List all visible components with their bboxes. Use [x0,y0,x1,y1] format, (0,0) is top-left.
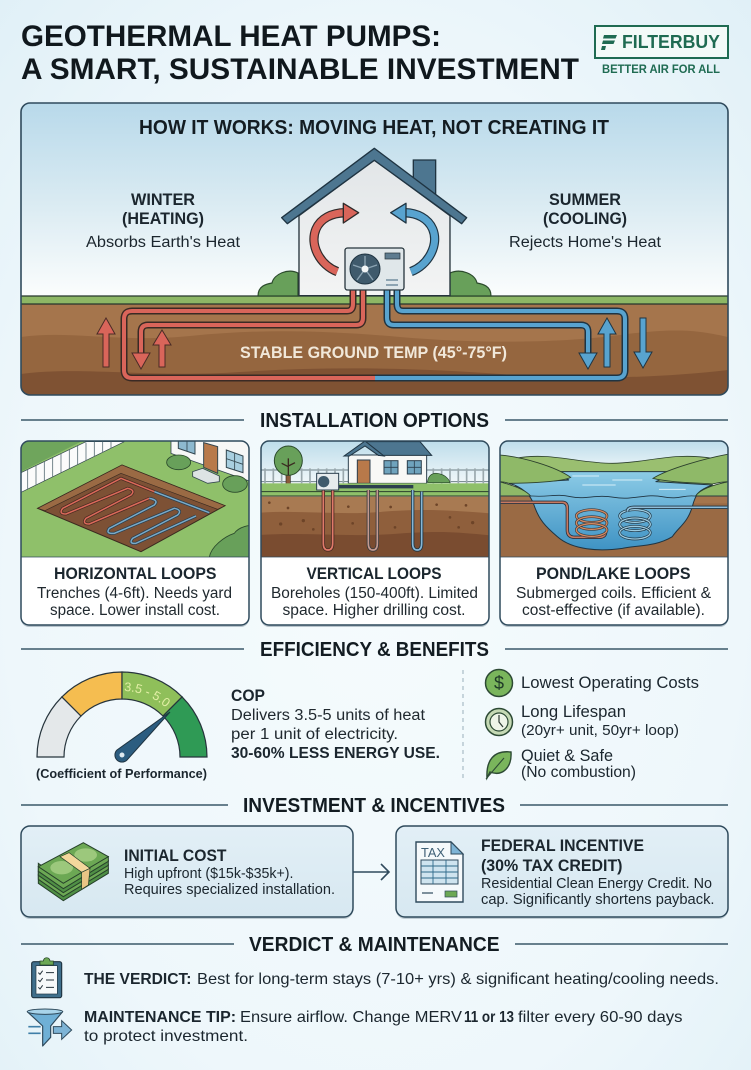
benefit: long lifespan: Long Lifespan [521,703,626,721]
panel: how it works [21,103,728,395]
benefit: lowest operating costs: $ [494,673,504,693]
text: federal incentive: cap. Significantly shortens payback. [481,892,714,908]
heading: installation options: INSTALLATION OPTIONS [260,409,489,432]
benefit: lowest operating costs [486,670,699,696]
text: maintenance tip: to protect investment. [84,1028,248,1045]
heading: verdict and maintenance: VERDICT & MAINTENANCE [249,933,500,956]
text: summer [509,191,662,251]
arrow: summer cool [391,203,435,272]
icon: tax form: TAX [421,846,446,860]
logo: Filterbuy [595,26,728,76]
arrow: cost to incentive [353,864,389,880]
text: initial cost: High upfront ($15k-$35k+). [124,865,294,882]
icon: funnel filter [27,1009,72,1046]
caption: pond/lake loops: Submerged coils. Efficient & [516,585,712,602]
text: federal incentive [481,837,714,908]
text: maintenance tip: MAINTENANCE TIP: [84,1009,236,1026]
text: federal incentive: FEDERAL INCENTIVE [481,837,644,855]
heading: how it works: HOW IT WORKS: MOVING HEAT, NOT CREATING IT [139,116,609,139]
title [21,20,579,86]
text: winter: Absorbs Earth's Heat [86,234,241,251]
panel: horizontal loops [21,440,251,627]
text: the verdict: Best for long-term stays (7-10+ yrs) & significant heating/cooling needs. [197,971,719,988]
caption: horizontal loops: space. Lower install cost. [50,602,220,619]
text: summer: (COOLING) [543,210,627,228]
text: initial cost: INITIAL COST [124,847,226,865]
benefit: long lifespan [486,703,679,739]
text: maintenance tip [84,1009,682,1045]
text: federal incentive: Residential Clean Energy Credit. No [481,876,712,892]
logo: Filterbuy: BETTER AIR FOR ALL [602,64,720,76]
text: COP: Delivers 3.5-5 units of heat [231,707,426,724]
arrows: red ground [97,318,171,369]
icon: clipboard [32,958,62,998]
caption: pond/lake loops: POND/LAKE LOOPS [536,565,690,583]
caption: vertical loops: VERTICAL LOOPS [306,565,442,583]
gauge caption: (Coefficient of Performance) [36,766,207,781]
heading: efficiency and benefits: EFFICIENCY & BENEFITS [260,638,489,661]
benefit: quiet and safe [486,747,636,781]
heading: investment and incentives: INVESTMENT & INCENTIVES [243,794,505,817]
pipes: red loop [124,290,375,378]
arrow: winter heat [314,203,359,272]
text: COP: 30-60% LESS ENERGY USE. [231,745,440,762]
label: stable ground temp: STABLE GROUND TEMP (45°-75°F) [240,344,507,362]
illustration: horizontal trench [21,440,251,557]
text: COP: COP [231,687,265,705]
caption: horizontal loops [37,565,232,619]
icon: money stack [38,843,108,901]
benefit: long lifespan: (20yr+ unit, 50yr+ loop) [521,722,679,739]
illustration: vertical boreholes [260,440,490,560]
text: maintenance tip: Ensure airflow. Change MERV [240,1009,462,1026]
icon: tax form [416,842,463,902]
text: winter: (HEATING) [122,210,204,228]
panel: federal incentive [396,826,728,919]
arrows: blue ground [579,318,652,369]
benefit: quiet and safe: (No combustion) [521,764,636,781]
text: winter: WINTER [131,191,195,209]
pipes: blue loop [375,290,625,378]
caption: vertical loops [271,565,478,619]
text: summer: Rejects Home's Heat [509,234,662,251]
caption: vertical loops: space. Higher drilling cost. [282,602,466,619]
text: the verdict: THE VERDICT: [84,971,192,988]
text: COP: per 1 unit of electricity. [231,726,398,743]
logo: Filterbuy: FILTERBUY [622,31,721,52]
benefit: quiet and safe: Quiet & Safe [521,747,613,765]
text: summer: SUMMER [549,191,621,209]
text: initial cost [124,847,335,898]
benefit: lowest operating costs: Lowest Operating Costs [521,674,699,692]
text: initial cost: Requires specialized installation. [124,881,335,898]
gauge needle [115,712,170,762]
text: maintenance tip: 11 or 13 [464,1009,514,1026]
title: A SMART, SUSTAINABLE INVESTMENT [21,53,579,86]
caption: horizontal loops: Trenches (4-6ft). Needs yard [37,585,232,602]
text: winter [86,191,241,251]
heat pump unit [345,248,404,290]
panel: initial cost [21,826,353,919]
title: GEOTHERMAL HEAT PUMPS: [21,20,441,53]
bushes [258,271,491,296]
caption: pond/lake loops: cost-effective (if available). [522,602,705,619]
panel: pond/lake loops [499,440,729,627]
text: federal incentive: (30% TAX CREDIT) [481,857,622,875]
house [282,148,467,296]
panel: vertical loops [260,440,490,627]
text: maintenance tip: filter every 60-90 days [518,1009,682,1026]
caption: vertical loops: Boreholes (150-400ft). Limited [271,585,478,602]
gauge value: 3.5 - 5.0 [124,682,170,706]
caption: pond/lake loops [516,565,712,619]
illustration: pond coils [499,440,729,560]
text: COP [231,687,440,762]
caption: horizontal loops: HORIZONTAL LOOPS [54,565,216,583]
gauge: coefficient of performance [36,671,208,781]
